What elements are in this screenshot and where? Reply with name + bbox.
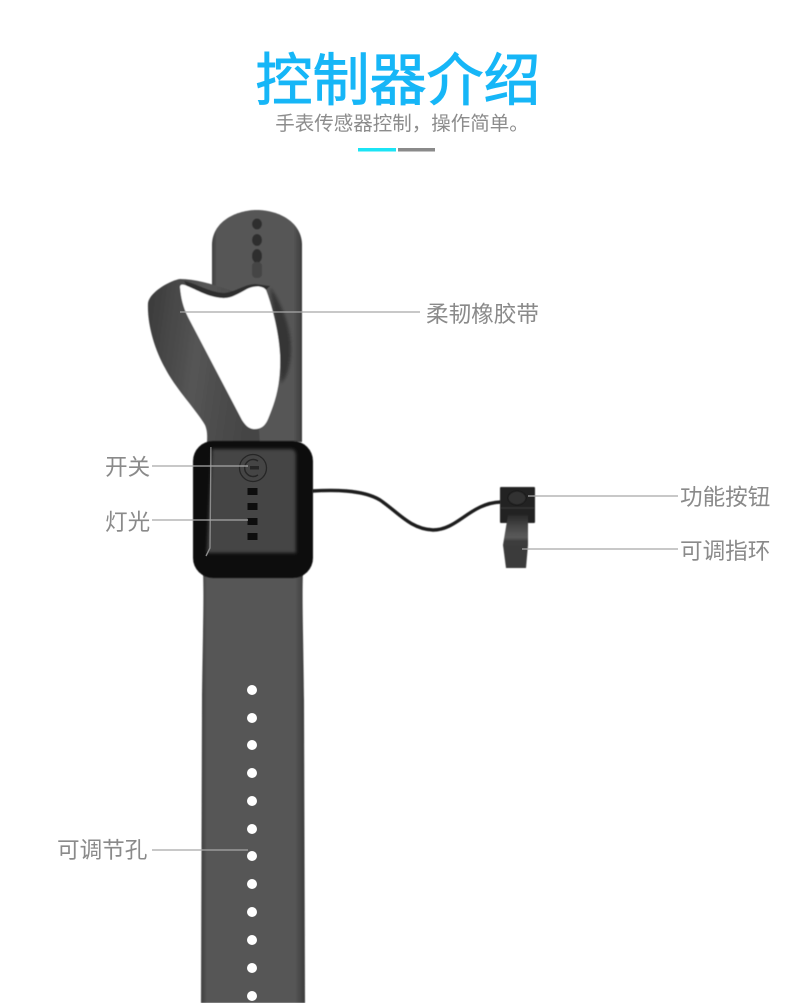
label: function button: 功能按钮 <box>680 485 770 510</box>
adjustment holes <box>247 685 257 1001</box>
case edge highlight <box>206 447 211 556</box>
power icon <box>240 454 266 482</box>
rubber loop <box>148 279 260 444</box>
case body <box>193 441 313 578</box>
lower watch strap <box>201 570 305 1003</box>
case face <box>207 449 296 553</box>
upper watch strap with loop <box>148 210 302 444</box>
subtitle: 手表传感器控制，操作简单。 <box>275 113 529 135</box>
labels <box>57 302 770 863</box>
label: light: 灯光 <box>105 510 150 535</box>
label: rubber strap: 柔韧橡胶带 <box>426 302 539 327</box>
label: switch: 开关 <box>105 455 150 480</box>
label: adjustment holes: 可调节孔 <box>57 838 147 863</box>
leader lines <box>152 312 678 850</box>
controller case <box>193 441 313 578</box>
title: 控制器介绍 <box>256 49 540 113</box>
adjustable ring <box>503 515 528 568</box>
button block <box>500 487 535 523</box>
cable <box>312 490 501 530</box>
strap pin studs <box>252 218 262 278</box>
function button <box>508 491 526 505</box>
loop opening <box>180 285 280 429</box>
label: adjustable ring: 可调指环 <box>680 539 770 564</box>
indicator lights <box>248 488 258 540</box>
finger ring controller <box>500 487 535 568</box>
title accent bar <box>358 148 435 152</box>
right loop shading <box>270 287 291 384</box>
upper strap body <box>212 210 302 442</box>
block seam <box>501 507 534 509</box>
top band of loop <box>184 281 270 302</box>
